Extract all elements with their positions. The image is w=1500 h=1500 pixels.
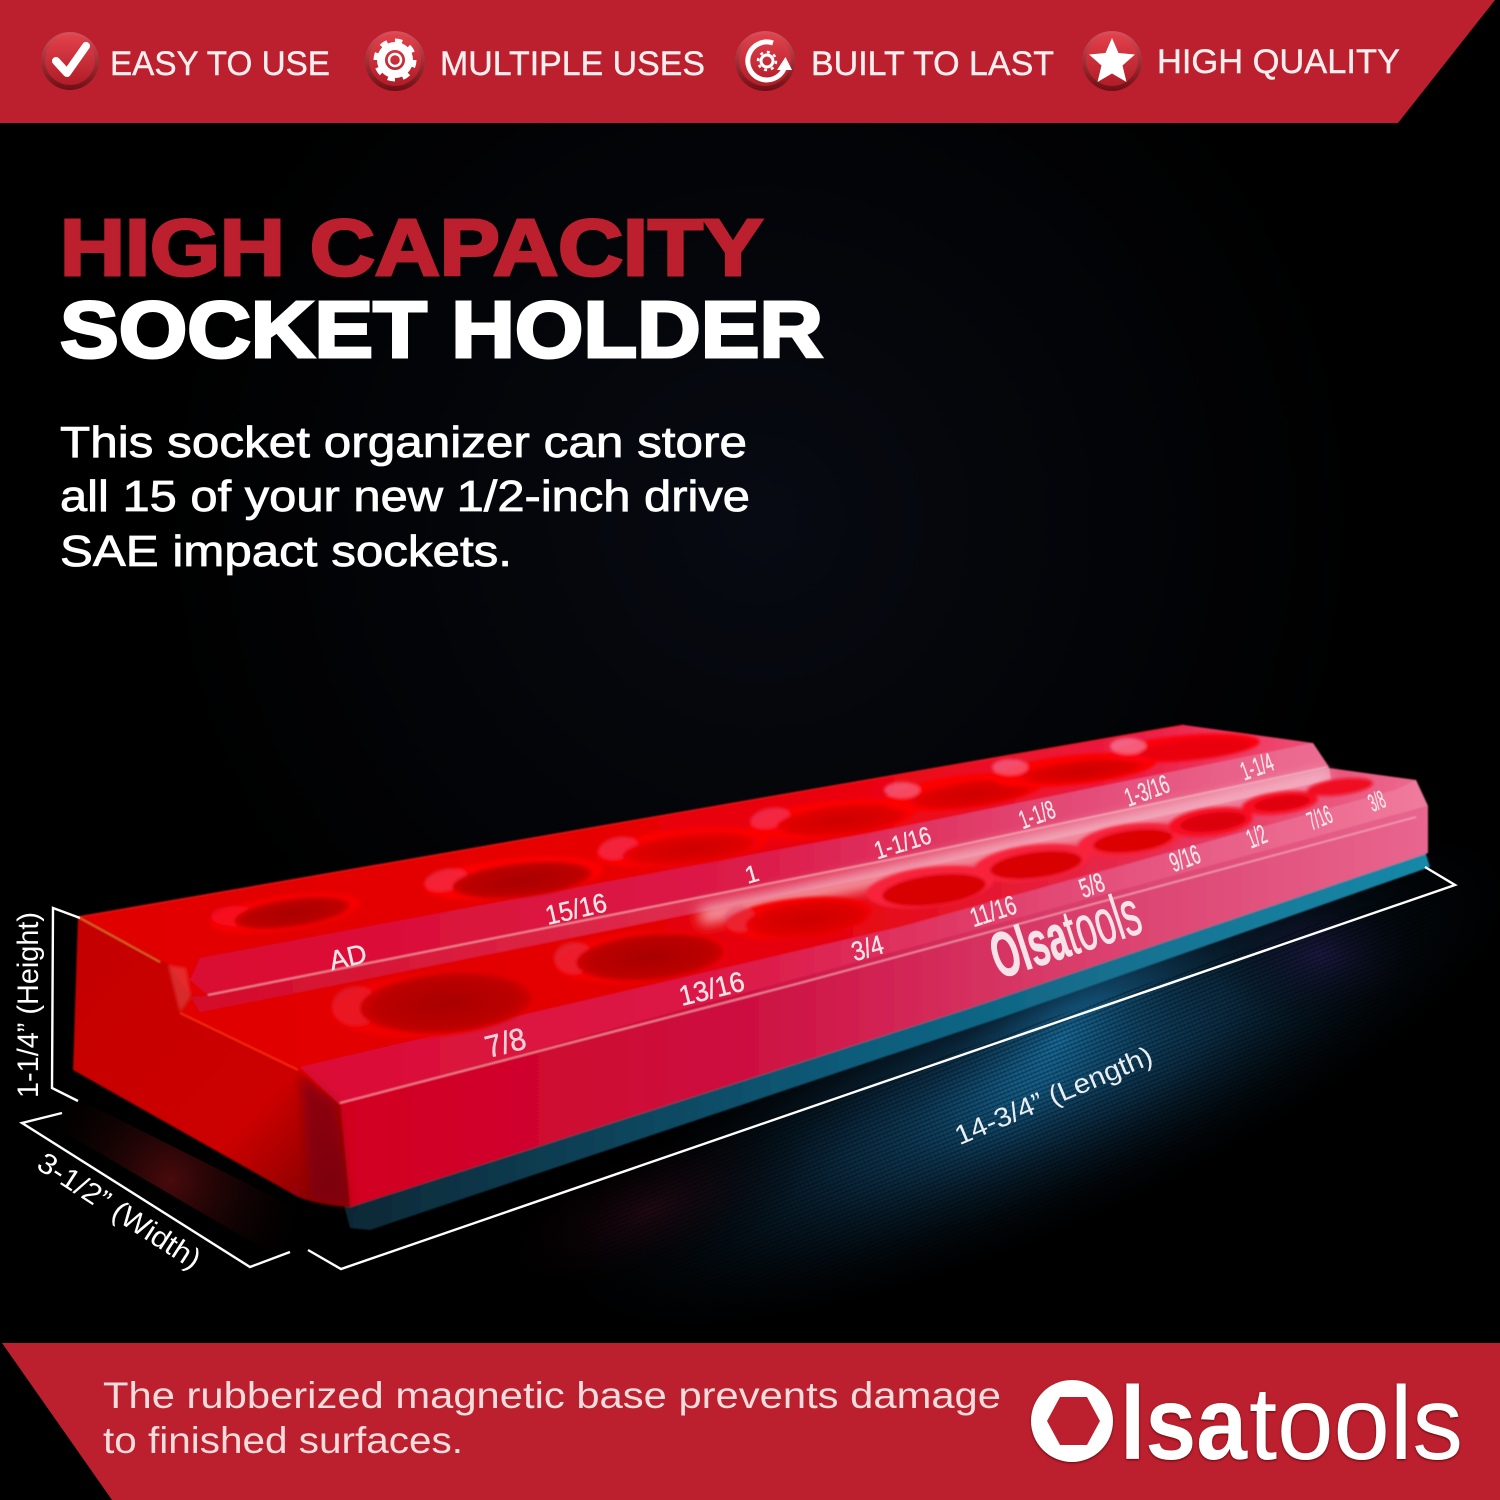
top banner bbox=[0, 0, 1495, 123]
socket size labels: 13/16 bbox=[676, 965, 748, 1012]
socket size labels: 15/16 bbox=[543, 889, 610, 931]
tray left end face bbox=[73, 917, 350, 1207]
socket tray bbox=[73, 725, 1430, 1230]
socket size labels: 9/16 bbox=[1165, 839, 1204, 878]
magnetic base bbox=[344, 851, 1430, 1230]
lower row of socket holes bbox=[329, 775, 1374, 1044]
upper tier lower wall bbox=[191, 767, 1331, 1012]
icon: gear bbox=[365, 31, 425, 91]
brand logo bbox=[1030, 1366, 1463, 1482]
socket size labels: 3/8 bbox=[1364, 786, 1390, 818]
socket size labels bbox=[326, 748, 1390, 1065]
height dimension: 1-1/4” (Height) bbox=[12, 912, 45, 1098]
socket size labels: 7/8 bbox=[482, 1022, 530, 1065]
socket size labels: 5/8 bbox=[1075, 866, 1109, 904]
front-face edge highlight bbox=[340, 817, 1416, 1103]
socket size labels: AD bbox=[326, 938, 370, 976]
tray logo: Olsatools bbox=[981, 876, 1149, 992]
title: HIGH CAPACITY bbox=[60, 203, 763, 292]
socket size labels: 3/4 bbox=[848, 930, 887, 968]
brand logo: lsa bbox=[1120, 1366, 1248, 1482]
feature: multiple uses: MULTIPLE USES bbox=[440, 45, 705, 83]
title bbox=[60, 203, 823, 374]
icon: circular arrow with gear bbox=[735, 31, 795, 91]
description bbox=[60, 418, 750, 576]
tray body bbox=[73, 725, 1430, 1230]
width dimension bbox=[22, 1113, 290, 1276]
description: This socket organizer can store bbox=[60, 418, 747, 467]
socket size labels: 1/2 bbox=[1242, 819, 1271, 854]
description: all 15 of your new 1/2-inch drive bbox=[60, 472, 750, 521]
socket size labels: 1 bbox=[742, 860, 762, 890]
icon: star bbox=[1082, 31, 1142, 91]
upper row of socket holes bbox=[207, 729, 1261, 941]
upper tier top surface bbox=[78, 725, 1329, 997]
feature: built to last: BUILT TO LAST bbox=[811, 45, 1054, 83]
base note: to finished surfaces. bbox=[103, 1420, 463, 1461]
description: SAE impact sockets. bbox=[60, 527, 512, 576]
socket size labels: 7/16 bbox=[1304, 801, 1337, 836]
feature: easy to use: EASY TO USE bbox=[110, 45, 330, 83]
tray front face bbox=[340, 806, 1428, 1207]
title: SOCKET HOLDER bbox=[60, 285, 823, 374]
soft highlight along the wall bbox=[700, 772, 1330, 925]
upper label band bbox=[190, 743, 1329, 995]
socket size labels: 1-3/16 bbox=[1120, 769, 1174, 812]
socket size labels: 1-1/16 bbox=[870, 821, 934, 865]
base note bbox=[103, 1375, 1001, 1461]
length dimension bbox=[308, 867, 1455, 1269]
socket size labels: 1-1/4 bbox=[1237, 748, 1278, 786]
lower tier top surface bbox=[180, 768, 1428, 1105]
socket size labels: 1-1/8 bbox=[1015, 794, 1059, 835]
base note: The rubberized magnetic base prevents damage bbox=[103, 1375, 1001, 1416]
brand logo: tools bbox=[1249, 1366, 1463, 1482]
lower label band bbox=[300, 780, 1428, 1105]
length dimension: 14-3/4” (Length) bbox=[950, 1040, 1157, 1151]
surface glow under tray bbox=[60, 731, 1500, 1429]
socket size labels: 11/16 bbox=[966, 890, 1020, 933]
width dimension: 3-1/2” (Width) bbox=[31, 1147, 206, 1276]
bottom banner bbox=[2, 1343, 1500, 1500]
height dimension bbox=[12, 908, 80, 1101]
feature: high quality: HIGH QUALITY bbox=[1157, 43, 1400, 81]
dark corner shading bbox=[300, 1075, 348, 1205]
icon: check mark bbox=[41, 32, 99, 90]
